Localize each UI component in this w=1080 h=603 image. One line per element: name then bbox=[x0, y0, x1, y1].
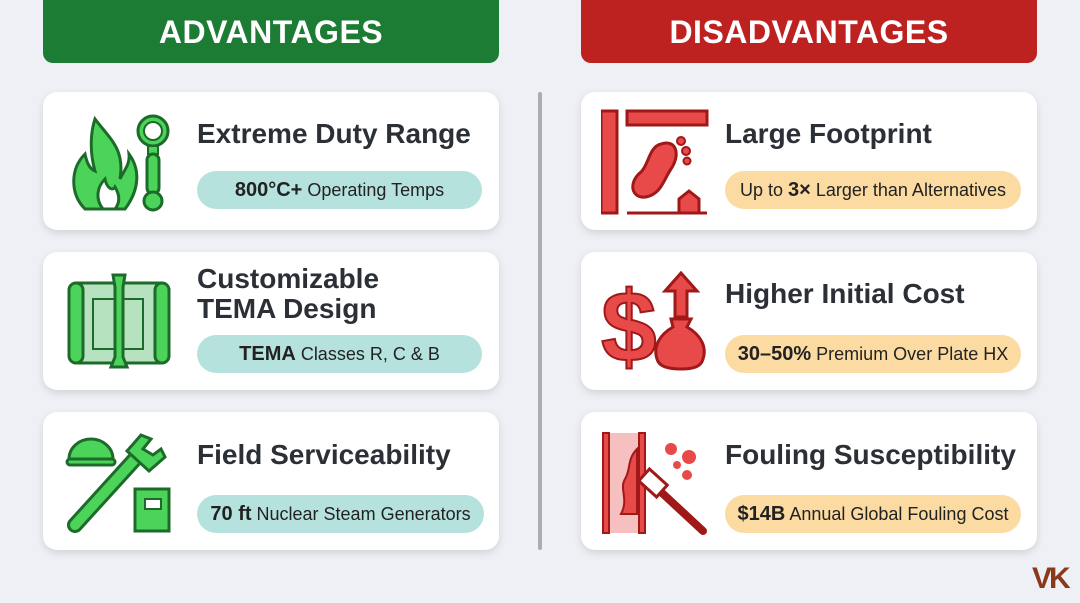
title: Extreme Duty Range bbox=[197, 118, 471, 149]
card: fouling susceptibility bbox=[581, 412, 1037, 550]
title: Large Footprint bbox=[725, 118, 932, 149]
pill bbox=[725, 335, 1021, 373]
header: disadvantages bbox=[581, 0, 1037, 63]
icon: fouled tube brush bbox=[602, 432, 707, 535]
title: Higher Initial Cost bbox=[725, 278, 965, 309]
pill: TEMA Classes R, C & B bbox=[239, 343, 440, 365]
card: extreme duty range bbox=[43, 92, 499, 230]
pill: $14B Annual Global Fouling Cost bbox=[738, 503, 1008, 525]
pill: Up to 3× Larger than Alternatives bbox=[740, 179, 1006, 201]
card: customizable TEMA bbox=[43, 252, 499, 390]
title bbox=[197, 263, 379, 324]
title: TEMA Design bbox=[197, 293, 376, 324]
pill bbox=[197, 495, 484, 533]
divider bbox=[538, 92, 542, 550]
card: large footprint bbox=[581, 92, 1037, 230]
pill: 800°C+ Operating Temps bbox=[235, 179, 444, 201]
icon: rulers footprint bbox=[601, 110, 708, 214]
header: advantages bbox=[43, 0, 499, 63]
pill bbox=[725, 495, 1021, 533]
card: higher initial cost bbox=[581, 252, 1037, 390]
pill bbox=[197, 335, 482, 373]
icon: dollar and money bag bbox=[601, 270, 706, 375]
icon: blueprint wrench bbox=[68, 274, 170, 368]
title: Fouling Susceptibility bbox=[725, 439, 1016, 470]
icon: hard hat wrench notebook bbox=[66, 433, 170, 533]
pill bbox=[725, 171, 1021, 209]
title: Customizable bbox=[197, 263, 379, 294]
pill bbox=[197, 171, 482, 209]
card: field serviceability bbox=[43, 412, 499, 550]
icon: flame and gauge bbox=[72, 114, 170, 212]
title: Field Serviceability bbox=[197, 439, 451, 470]
pill: 70 ft Nuclear Steam Generators bbox=[210, 503, 471, 525]
pill: 30–50% Premium Over Plate HX bbox=[738, 343, 1008, 365]
logo: VK: VK bbox=[1032, 562, 1068, 595]
header: disadvantages: DISADVANTAGES bbox=[669, 14, 949, 50]
header: advantages: ADVANTAGES bbox=[159, 14, 383, 50]
